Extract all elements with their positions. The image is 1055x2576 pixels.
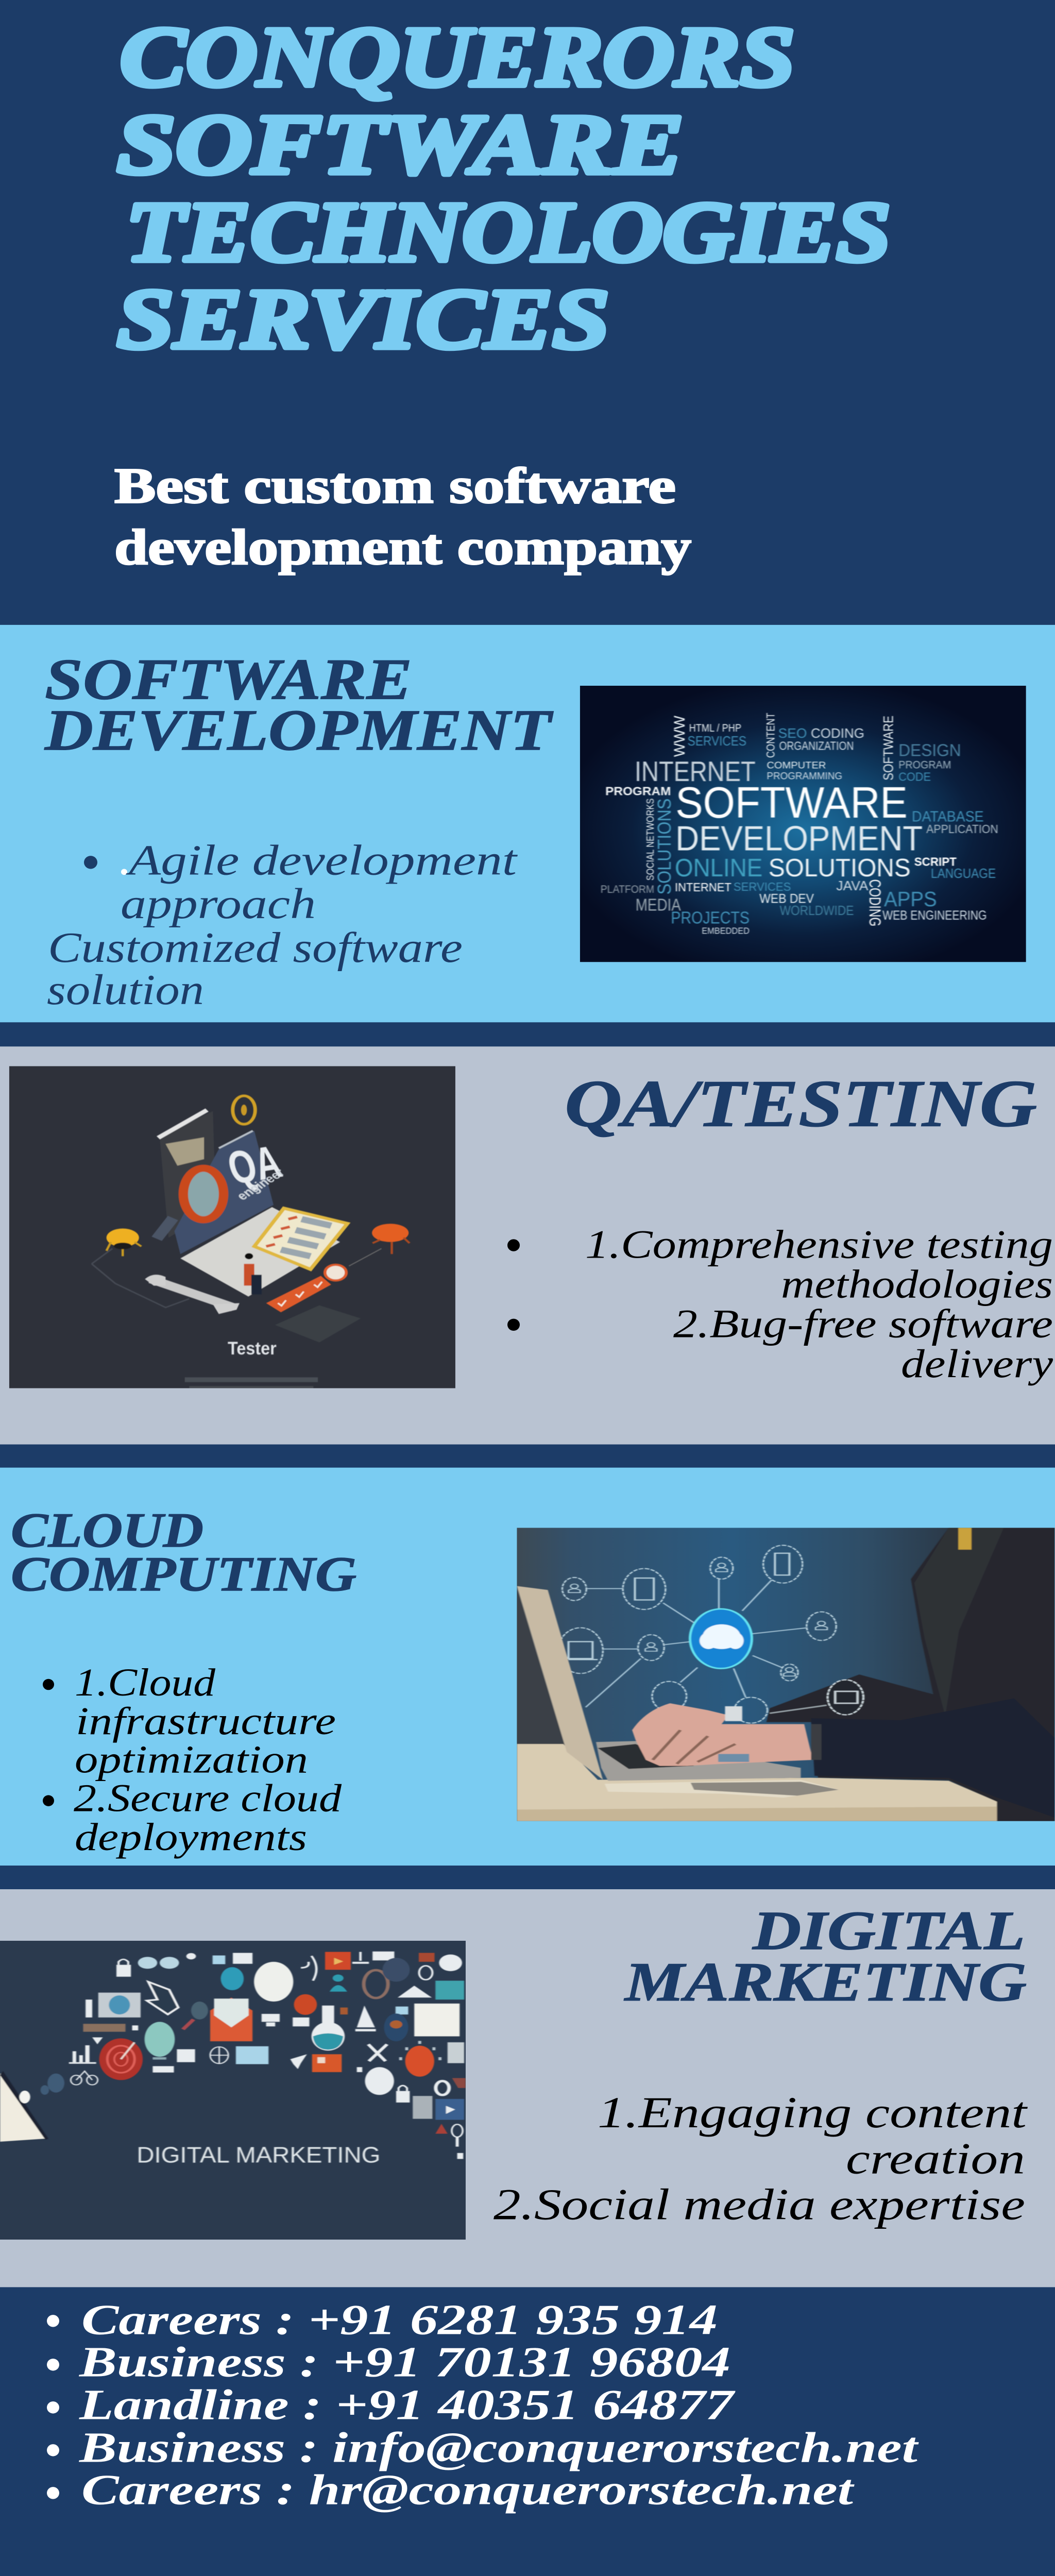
bullet list: cloud computing: 1.Cloud <box>75 1660 215 1704</box>
heading: digital marketing: DIGITAL <box>752 1900 1025 1961</box>
subtitle: development company <box>114 520 691 575</box>
bullet: business email: Business : info@conquerorstech.net <box>79 2424 919 2471</box>
divider band <box>0 1445 1055 1468</box>
bullet: landline: Landline : +91 40351 64877 <box>79 2381 736 2429</box>
image: software word cloud: SOLUTIONS <box>654 799 675 895</box>
image: software word cloud: SERVICES <box>688 734 746 749</box>
bullet list: cloud computing: infrastructure <box>76 1699 336 1743</box>
image: software word cloud: INTERNET <box>635 756 756 787</box>
bullet list: cloud computing <box>43 1660 342 1859</box>
heading: cloud computing: CLOUD <box>11 1503 203 1557</box>
image: software word cloud: HTML / PHP <box>689 722 741 734</box>
icon: megaphone <box>0 2071 48 2142</box>
image: software word cloud: INTERNET <box>675 881 731 894</box>
divider band <box>0 1022 1055 1046</box>
image: hands typing on laptop with cloud network <box>517 1528 1054 1821</box>
heading: software development: SOFTWARE <box>45 647 412 711</box>
image: software word cloud: ORGANIZATION <box>779 739 854 753</box>
image: software word cloud: PROJECTS <box>671 908 750 927</box>
image: software word cloud: SOFTWARE <box>881 716 896 781</box>
list: digital marketing: 1.Engaging content <box>598 2088 1028 2137</box>
heading: QA testing: QA/TESTING <box>565 1067 1037 1141</box>
bullet list: QA testing <box>507 1223 1053 1386</box>
image: digital marketing icons <box>0 1941 466 2240</box>
bullet list: cloud computing: 2.Secure cloud <box>74 1776 342 1820</box>
image: digital marketing icons: DIGITAL MARKETING <box>137 2143 380 2167</box>
image: QA engineer isometric illustration: Tester <box>228 1338 277 1358</box>
bullet list: cloud computing: deployments <box>75 1815 307 1859</box>
panel: QA testing <box>0 1046 1055 1445</box>
subtitle: Best custom software <box>114 459 676 514</box>
image: software word cloud: WEB DEV <box>759 892 814 906</box>
image: software word cloud: PROGRAM <box>605 785 671 798</box>
list: digital marketing: creation <box>846 2134 1025 2183</box>
panel: software development <box>0 625 1055 1022</box>
bullet list: QA testing: 1.Comprehensive testing <box>585 1223 1053 1267</box>
image: software word cloud: CODING <box>811 726 864 741</box>
image: software word cloud: SOLUTIONS <box>769 853 911 882</box>
image: software word cloud: EMBEDDED <box>702 926 750 936</box>
image: software word cloud: DATABASE <box>912 808 984 825</box>
image: software word cloud: SOCIAL NETWORKS <box>644 799 656 880</box>
title <box>117 10 891 366</box>
bullet: business phone: Business : +91 70131 96804 <box>79 2338 730 2386</box>
panel: cloud computing <box>0 1468 1055 1866</box>
image: software word cloud: CODING <box>866 879 884 926</box>
image: software word cloud: PLATFORM <box>601 883 654 895</box>
title: SOFTWARE <box>117 97 684 192</box>
image: software word cloud: WORLDWIDE <box>780 903 854 918</box>
image: software word cloud: ONLINE <box>675 853 762 882</box>
image: software word cloud: MEDIA <box>636 895 681 914</box>
image: software word cloud: SERVICES <box>734 880 791 893</box>
heading: software development <box>44 647 554 762</box>
image: software word cloud: PROGRAMMING <box>767 771 842 782</box>
image: software word cloud: DESIGN <box>898 741 961 760</box>
image: QA engineer isometric illustration: engineer <box>233 1166 288 1202</box>
image: QA engineer isometric illustration <box>9 1066 455 1388</box>
heading: cloud computing: COMPUTING <box>11 1547 356 1601</box>
image: software word cloud: APPS <box>884 887 937 911</box>
image: software word cloud: LANGUAGE <box>931 866 996 881</box>
image: QA engineer isometric illustration: QA <box>222 1136 287 1194</box>
bullet list: software development: approach <box>121 880 316 928</box>
title: TECHNOLOGIES <box>126 185 891 279</box>
image: software word cloud: CONTENT <box>764 713 777 758</box>
heading: digital marketing <box>624 1900 1027 2013</box>
bullet list: QA testing: delivery <box>901 1342 1053 1386</box>
bullet: careers email: Careers : hr@conquerorstech.net <box>81 2466 855 2514</box>
panel: contact footer <box>0 2287 1055 2576</box>
bullet list: software development: Agile development <box>126 836 518 884</box>
heading: software development: DEVELOPMENT <box>44 698 554 762</box>
bullet list: software development <box>47 836 518 1014</box>
image: software word cloud <box>580 686 1026 962</box>
image: software word cloud: APPLICATION <box>926 822 998 836</box>
subtitle <box>114 459 691 575</box>
title: CONQUERORS <box>120 10 795 105</box>
image: software word cloud: PROGRAM <box>898 759 951 771</box>
image: software word cloud: JAVA <box>836 878 869 893</box>
panel: digital marketing <box>0 1889 1055 2287</box>
bullet: careers phone: Careers : +91 6281 935 914 <box>81 2296 718 2344</box>
image: software word cloud: SEO <box>778 726 807 741</box>
image: software word cloud: WWW <box>672 715 688 757</box>
image: software word cloud: COMPUTER <box>767 760 826 771</box>
bullet list: software development: Customized software <box>48 924 463 972</box>
image: software word cloud: SOFTWARE <box>675 778 908 827</box>
image: software word cloud: SCRIPT <box>914 855 957 869</box>
bullet list: software development: solution <box>47 966 204 1014</box>
image: software word cloud: CODE <box>898 770 931 784</box>
bullet list: cloud computing: optimization <box>75 1737 308 1781</box>
bullet list: QA testing: methodologies <box>781 1262 1053 1307</box>
list: digital marketing: 2.Social media expertise <box>494 2180 1025 2229</box>
heading: cloud computing <box>11 1503 356 1601</box>
bullet list: QA testing: 2.Bug-free software <box>673 1302 1053 1346</box>
heading: digital marketing: MARKETING <box>624 1951 1027 2013</box>
background band: header <box>0 0 1055 625</box>
title: SERVICES <box>117 272 609 366</box>
divider band <box>0 1866 1055 1889</box>
list: digital marketing <box>494 2088 1028 2229</box>
